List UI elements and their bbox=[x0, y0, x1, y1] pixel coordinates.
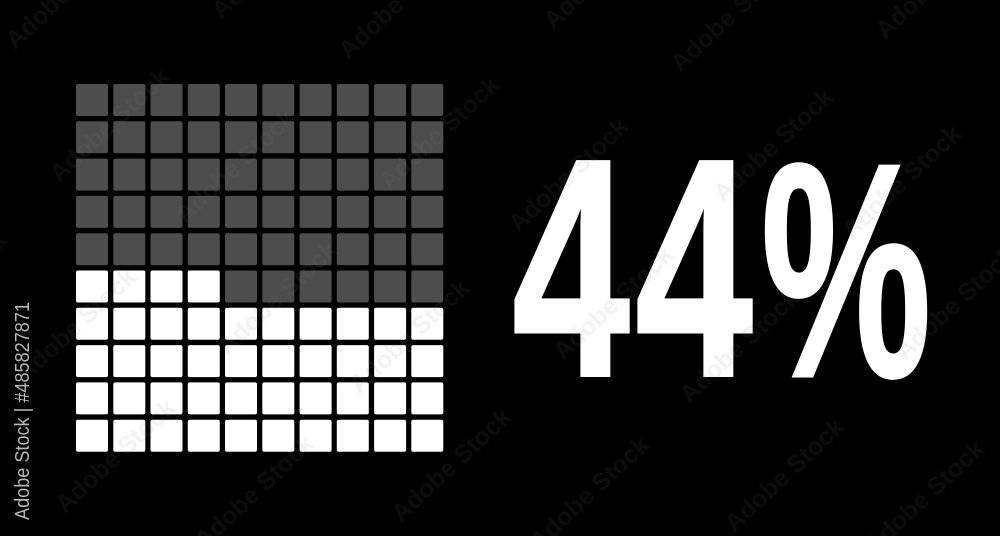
second digit: 4 bbox=[635, 96, 754, 442]
watermarks: Adobe Stock bbox=[503, 113, 634, 237]
watermarks: Adobe Stock bbox=[170, 104, 301, 228]
unfilled squares bbox=[76, 84, 443, 302]
watermarks: Adobe Stock bbox=[44, 63, 175, 187]
big percentage figure bbox=[512, 96, 931, 442]
first digit: 4 bbox=[512, 96, 631, 442]
watermarks: Adobe Stock bbox=[719, 413, 850, 536]
watermarks: Adobe Stock bbox=[374, 71, 505, 195]
watermarks: Adobe Stock bbox=[548, 241, 679, 365]
watermarks: Adobe Stock bbox=[674, 284, 805, 408]
waffle chart: 44 of 100 squares filled bbox=[76, 84, 443, 452]
watermarks: Adobe Stock bbox=[50, 394, 181, 518]
stock credit, vertical: Adobe Stock | #485827871 bbox=[12, 302, 34, 520]
filled squares bbox=[76, 270, 443, 452]
watermarks: Adobe Stock bbox=[212, 236, 343, 360]
percent sign: % bbox=[761, 99, 931, 441]
watermarks: Adobe Stock bbox=[836, 120, 967, 244]
watermarks: Adobe Stock bbox=[708, 83, 839, 207]
watermarks: Adobe Stock bbox=[344, 274, 475, 398]
watermarks: Adobe Stock bbox=[386, 403, 517, 527]
watermarks: Adobe Stock bbox=[11, 263, 142, 387]
